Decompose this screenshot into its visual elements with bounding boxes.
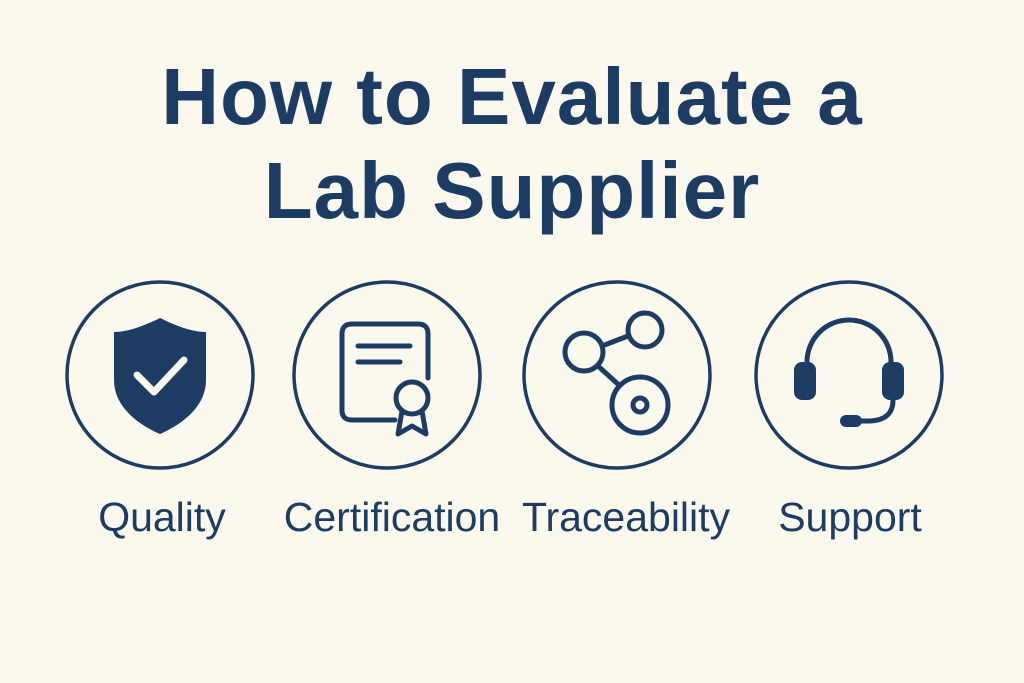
label: certification: Certification (284, 494, 500, 540)
title: Lab Supplier (264, 146, 760, 235)
title (161, 52, 863, 235)
icon: certification document (294, 282, 480, 468)
label: traceability: Traceability (522, 494, 730, 540)
icon: support headset (756, 282, 942, 468)
icon: traceability nodes (524, 282, 710, 468)
title: How to Evaluate a (161, 52, 863, 141)
icon: quality shield (67, 282, 253, 468)
label: support: Support (778, 494, 922, 540)
label: quality: Quality (98, 494, 226, 540)
